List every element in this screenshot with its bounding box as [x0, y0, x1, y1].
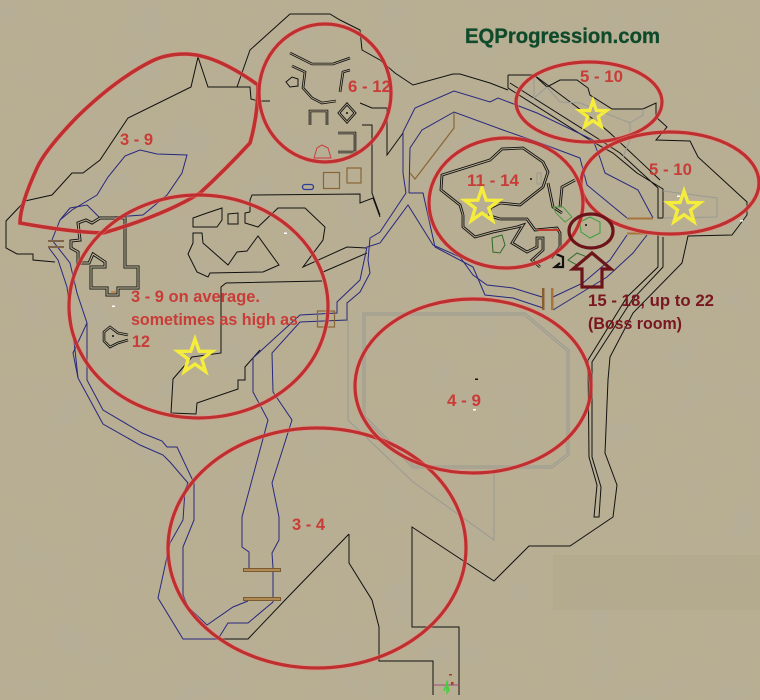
label: 3-9 on average: 3 - 9 on average.: [131, 287, 260, 306]
left fortress: thick double wall: [71, 218, 138, 295]
label: boss room: 15 - 18, up to 22: [588, 291, 714, 310]
zone: 5-10 right circle: [581, 132, 759, 234]
label: 3-9: 3 - 9: [120, 130, 153, 149]
brown bridges and doors: [48, 113, 658, 600]
11-14 cave: double wall: [441, 148, 575, 267]
label: 4-9: 4 - 9: [447, 391, 481, 410]
zone: 11-14 circle: [429, 138, 583, 268]
zone: 3-9 blob outline: [20, 54, 258, 233]
star: 11-14: [465, 188, 499, 220]
label: boss room: [588, 291, 714, 333]
label: boss room: (Boss room): [588, 314, 682, 333]
label: 11-14: 11 - 14: [467, 171, 520, 190]
arrow: points to boss room: [573, 253, 611, 287]
zone: 4-9 circle: [355, 299, 591, 473]
star: 3-9 average: [178, 339, 212, 372]
zone: 3-9 on average circle: [69, 195, 328, 418]
label: 3-9 on average: sometimes as high as: [131, 310, 298, 329]
zone: 6-12 circle: [259, 24, 391, 162]
map: grey room outlines: [348, 78, 717, 540]
zone: 5-10 top circle: [516, 62, 662, 142]
label: 6-12: 6 - 12: [348, 77, 391, 96]
title: EQProgression.com: [465, 25, 660, 48]
spawn markers: [112, 196, 743, 410]
green room outlines: [492, 207, 600, 265]
label: 3-9 on average: [131, 287, 298, 351]
label: 5-10 top: 5 - 10: [580, 67, 623, 86]
map: blue water channels: [49, 91, 653, 639]
label: 5-10 right: 5 - 10: [649, 160, 692, 179]
zone: 3-4 circle: [168, 428, 466, 668]
boss room circle: [569, 214, 613, 248]
star: top 5-10: [580, 101, 606, 126]
star: right 5-10: [668, 191, 700, 222]
label: 3-9 on average: 12: [132, 332, 150, 351]
player marker: [433, 674, 459, 694]
keyhole room: [104, 327, 128, 347]
6-12 area rooms: [286, 53, 355, 158]
label: 3-4: 3 - 4: [292, 515, 326, 534]
